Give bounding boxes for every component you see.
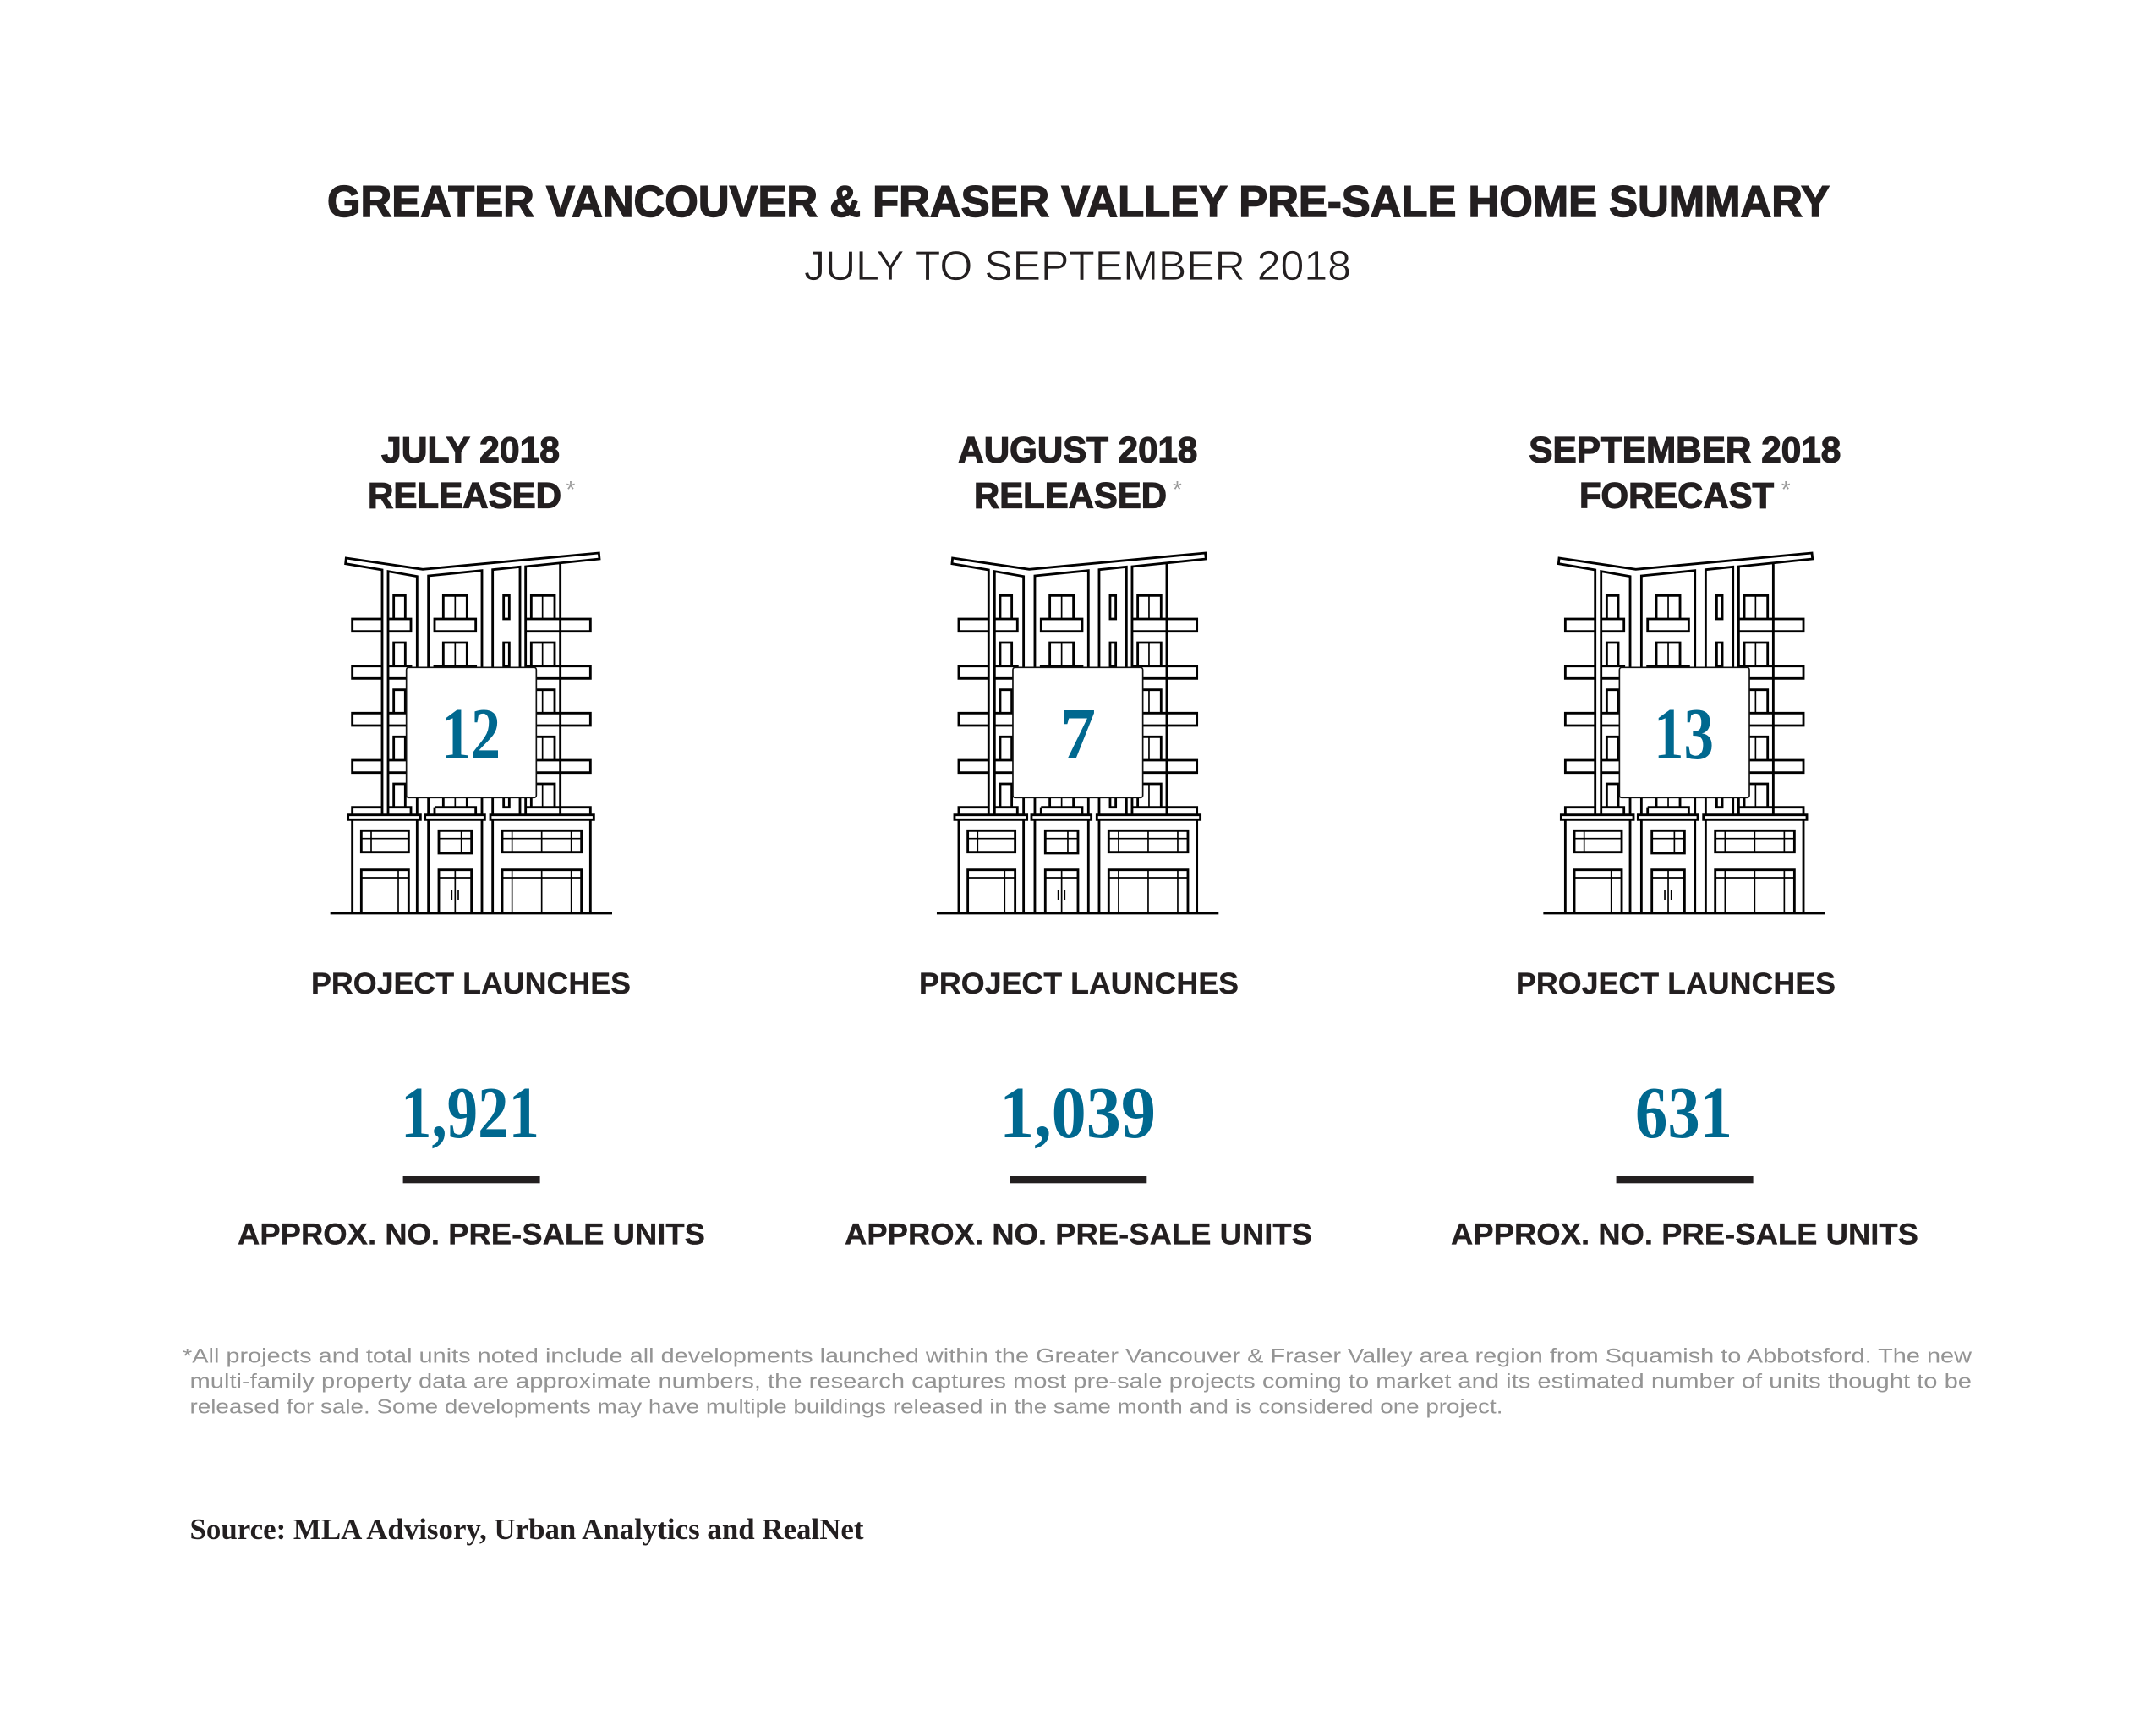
panel: September 2018 <box>1451 431 1918 1251</box>
label: project launches: PROJECT LAUNCHES <box>311 967 631 1000</box>
heading: July 2018 released: RELEASED <box>368 477 561 517</box>
rule <box>1010 1176 1146 1183</box>
panel: July 2018 <box>238 431 705 1251</box>
project launches count: 7 <box>1060 693 1096 775</box>
heading: August 2018 released: AUGUST 2018 <box>958 431 1197 471</box>
heading: July 2018 released <box>368 431 575 517</box>
rule <box>403 1176 540 1183</box>
heading: September 2018 forecast: SEPTEMBER 2018 <box>1529 431 1841 471</box>
heading: September 2018 forecast <box>1529 431 1841 517</box>
footnote <box>183 1345 1972 1419</box>
project launches count: 13 <box>1654 693 1714 775</box>
footnote: multi-family property data are approximate numbers, the research captures most pre-sale projects coming to market and its estimated number of units thought to be <box>189 1371 1972 1394</box>
icon: apartment building <box>937 553 1218 913</box>
heading: July 2018 released: JULY 2018 <box>381 431 560 471</box>
heading: August 2018 released: * <box>1173 476 1182 502</box>
units figure: 1,039 <box>999 1071 1156 1153</box>
units figure: 1,921 <box>401 1071 539 1153</box>
icon: apartment building <box>331 553 612 913</box>
units figure: 631 <box>1635 1071 1732 1153</box>
label: project launches: PROJECT LAUNCHES <box>919 967 1239 1000</box>
project launches count: 12 <box>441 693 501 775</box>
label: pre-sale units: APPROX. NO. PRE-SALE UNITS <box>238 1218 705 1251</box>
footnote: *All projects and total units noted include all developments launched within the Greater Vancouver & Fraser Valley area region from Squamish to Abbotsford. The new <box>183 1345 1972 1368</box>
label: project launches: PROJECT LAUNCHES <box>1516 967 1836 1000</box>
heading: September 2018 forecast: * <box>1781 476 1791 502</box>
rule <box>1617 1176 1754 1183</box>
label: pre-sale units: APPROX. NO. PRE-SALE UNITS <box>1451 1218 1918 1251</box>
heading: July 2018 released: * <box>566 476 575 502</box>
source: Source: MLA Advisory, Urban Analytics and RealNet <box>189 1513 864 1546</box>
heading: September 2018 forecast: FORECAST <box>1579 477 1774 517</box>
subtitle: JULY TO SEPTEMBER 2018 <box>804 244 1351 289</box>
heading: August 2018 released: RELEASED <box>974 477 1167 517</box>
heading: August 2018 released <box>958 431 1197 517</box>
footnote: released for sale. Some developments may have multiple buildings released in the same month and is considered one project. <box>189 1396 1503 1419</box>
panel: August 2018 <box>845 431 1312 1251</box>
label: pre-sale units: APPROX. NO. PRE-SALE UNITS <box>845 1218 1312 1251</box>
icon: apartment building <box>1543 553 1825 913</box>
title: GREATER VANCOUVER & FRASER VALLEY PRE-SALE HOME SUMMARY <box>327 178 1830 227</box>
